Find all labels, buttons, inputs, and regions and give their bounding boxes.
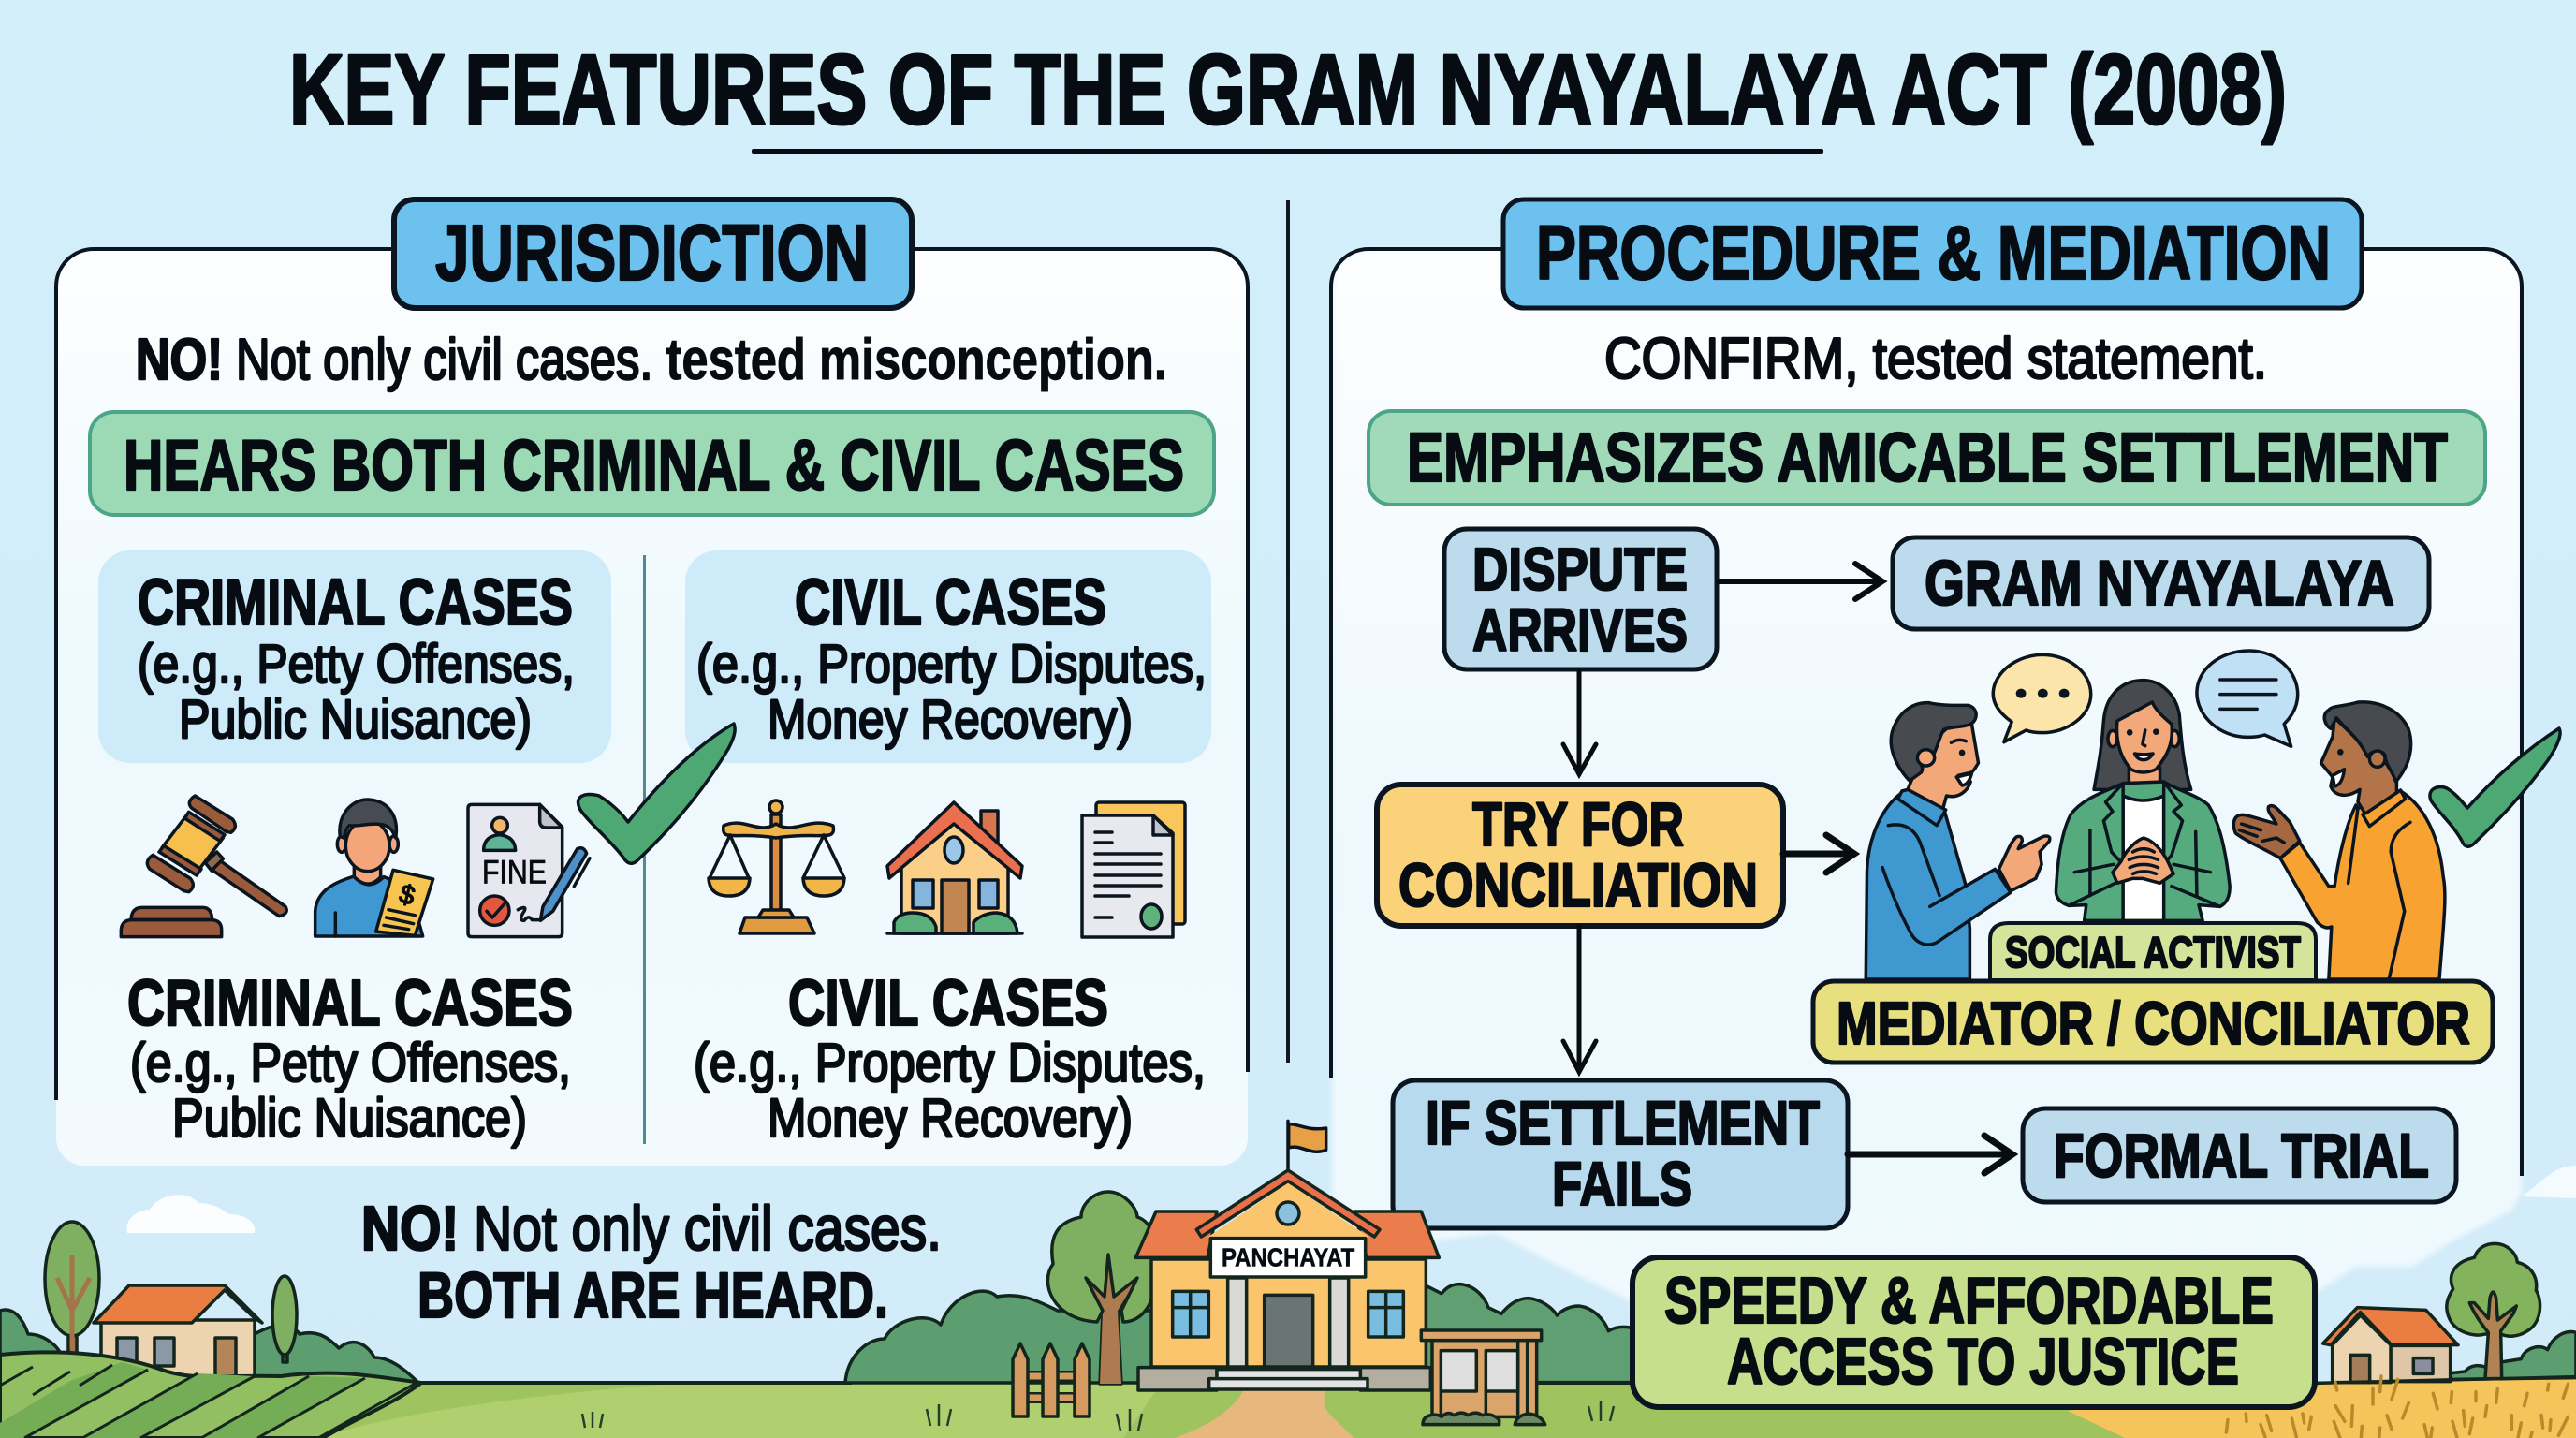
- card: civil cases: Money Recovery): [768, 689, 1133, 750]
- window mullions: [1173, 1291, 1403, 1337]
- panel outline: [1331, 249, 2522, 1176]
- wheat field: [2068, 1377, 2576, 1438]
- cloud right: [2521, 1166, 2576, 1198]
- lower text: criminal cases: Public Nuisance): [172, 1088, 527, 1149]
- landscape: village scene: [0, 1121, 2576, 1438]
- lower text: criminal cases: [127, 966, 573, 1149]
- left man: [1866, 703, 2050, 979]
- flow box: dispute arrives: [1444, 529, 1717, 669]
- tree left: [45, 1222, 99, 1357]
- icon: gavel: [121, 796, 286, 937]
- sign: panchayat: [1210, 1239, 1366, 1277]
- arrow: conciliation to mediators: [1783, 835, 1854, 873]
- dirt path: [1175, 1390, 1354, 1438]
- gable roof band: [1196, 1170, 1380, 1237]
- speech bubble: dots: [1993, 654, 2091, 742]
- lower text: criminal cases: CRIMINAL CASES: [127, 966, 573, 1039]
- cloud left: [126, 1195, 255, 1233]
- grass tufts: [582, 1401, 1614, 1431]
- callout: speedy and affordable access: ACCESS TO JUSTICE: [1727, 1325, 2239, 1398]
- flow box: dispute arrives: ARRIVES: [1472, 596, 1688, 664]
- lower text: civil cases: Money Recovery): [768, 1088, 1133, 1149]
- label: social activist: SOCIAL ACTIVIST: [2005, 928, 2301, 976]
- central gable: [1208, 1182, 1369, 1238]
- wheat stalks: [2226, 1376, 2568, 1438]
- tree right: [2447, 1243, 2540, 1379]
- callout: speedy and affordable access: SPEEDY & AFFORDABLE: [1664, 1264, 2274, 1337]
- woman mediator: [2056, 681, 2230, 920]
- flow box: gram nyayalaya: GRAM NYAYALAYA: [1925, 548, 2394, 619]
- arrow: conciliation to settlement fails: [1563, 927, 1596, 1072]
- icon: person with fine: [315, 800, 433, 936]
- flow box: if settlement fails: FAILS: [1552, 1149, 1692, 1218]
- right house: [2323, 1308, 2458, 1383]
- card: criminal cases: Public Nuisance): [179, 689, 532, 750]
- speech bubble: lines: [2197, 651, 2298, 746]
- panchayat building: [1135, 1121, 1439, 1390]
- horizon line: [417, 1381, 852, 1385]
- right man: [2233, 702, 2445, 979]
- icon: legal documents: [1082, 802, 1185, 937]
- heading: jurisdiction: JURISDICTION: [435, 209, 869, 297]
- heading: jurisdiction: [394, 199, 912, 308]
- vertical column divider: [643, 555, 646, 1144]
- card: criminal cases: [98, 550, 611, 763]
- door: [1265, 1295, 1313, 1367]
- icon: green check mark: [2430, 728, 2560, 846]
- banner: hears both: [90, 412, 1214, 515]
- heading: procedure and mediation: [1503, 199, 2362, 308]
- cypress tree: [272, 1276, 297, 1362]
- heading: procedure and mediation: PROCEDURE & MEDIATION: [1536, 211, 2331, 296]
- arrow: settlement fails to formal trial: [1848, 1136, 2012, 1173]
- icon: person with fine: $: [397, 879, 418, 911]
- conclusion text: both are heard: BOTH ARE HEARD.: [417, 1259, 888, 1331]
- columns: [1228, 1278, 1349, 1367]
- flow box: dispute arrives: DISPUTE: [1472, 536, 1688, 603]
- icon: fine document: [468, 804, 590, 937]
- ground line right: [1535, 1381, 1638, 1385]
- bushes far right: [2451, 1332, 2576, 1379]
- card: civil cases: CIVIL CASES: [795, 565, 1106, 638]
- kiosk shelter: [1421, 1330, 1545, 1425]
- panel background: [1332, 249, 2522, 1329]
- bushes behind left house: [255, 1326, 418, 1383]
- illustration: mediation group: [1866, 651, 2445, 979]
- flow box: formal trial: FORMAL TRIAL: [2054, 1121, 2429, 1190]
- arrow: dispute to conciliation: [1563, 671, 1596, 774]
- left house: [94, 1285, 262, 1377]
- fence: [1013, 1343, 1090, 1416]
- conclusion text: both are heard: [361, 1194, 942, 1331]
- tree centre: [1047, 1192, 1155, 1384]
- flow box: formal trial: [2023, 1108, 2456, 1202]
- lower text: civil cases: CIVIL CASES: [788, 966, 1108, 1039]
- flow box: if settlement fails: [1393, 1080, 1848, 1228]
- steps: [1209, 1370, 1368, 1389]
- plinth: [1138, 1368, 1430, 1390]
- bushes centre: [845, 1291, 1156, 1383]
- lower text: civil cases: [694, 966, 1206, 1149]
- flow box: try for conciliation: TRY FOR: [1472, 789, 1684, 858]
- icon: house: [887, 802, 1022, 933]
- title underline: [752, 149, 1823, 154]
- ground: [0, 1383, 2576, 1438]
- walls: [1151, 1259, 1426, 1367]
- sign: panchayat: PANCHAYAT: [1222, 1243, 1355, 1272]
- panel background: [56, 249, 1248, 1166]
- panel: jurisdiction: [56, 199, 1248, 1166]
- statement: confirm: CONFIRM, tested statement.: [1604, 327, 2267, 391]
- field edge: [2316, 1377, 2576, 1383]
- statement: misconception: NO! Not only civil cases. tested misconception.: [136, 328, 1167, 392]
- conclusion text: both are heard: NO! Not only civil cases.: [361, 1194, 942, 1264]
- bushes far left: [0, 1310, 62, 1367]
- icon: fine document: FINE: [482, 854, 547, 890]
- right village: [2226, 1243, 2576, 1438]
- left farmland: [0, 1352, 421, 1438]
- callout: speedy and affordable access: [1632, 1257, 2315, 1407]
- lower text: criminal cases: (e.g., Petty Offenses,: [130, 1033, 571, 1093]
- banner: hears both: HEARS BOTH CRIMINAL & CIVIL CASES: [124, 426, 1184, 506]
- flow box: if settlement fails: IF SETTLEMENT: [1426, 1088, 1820, 1157]
- card: criminal cases: CRIMINAL CASES: [138, 565, 573, 638]
- lower text: civil cases: (e.g., Property Disputes,: [694, 1033, 1206, 1093]
- flow box: try for conciliation: [1377, 785, 1783, 926]
- icon: green check mark: [578, 724, 735, 863]
- arrow: dispute to gram nyayalaya: [1719, 564, 1882, 599]
- flow box: try for conciliation: CONCILIATION: [1398, 850, 1758, 919]
- icon: scales of justice: [709, 800, 844, 933]
- panel outline: [56, 249, 1248, 1100]
- card: criminal cases: (e.g., Petty Offenses,: [138, 634, 575, 695]
- wing roofs: [1135, 1211, 1439, 1257]
- windows: [1173, 1291, 1403, 1337]
- flow box: gram nyayalaya: [1893, 537, 2429, 629]
- panel: procedure and mediation: [1331, 199, 2560, 1329]
- flag: [1288, 1121, 1326, 1170]
- round window: [1277, 1202, 1299, 1225]
- bushes right of panchayat: [1426, 1284, 1635, 1383]
- card: civil cases: (e.g., Property Disputes,: [696, 634, 1207, 695]
- center divider: [1286, 200, 1290, 1063]
- card: civil cases: [685, 550, 1211, 763]
- lighter ground sweep: [318, 1384, 1161, 1438]
